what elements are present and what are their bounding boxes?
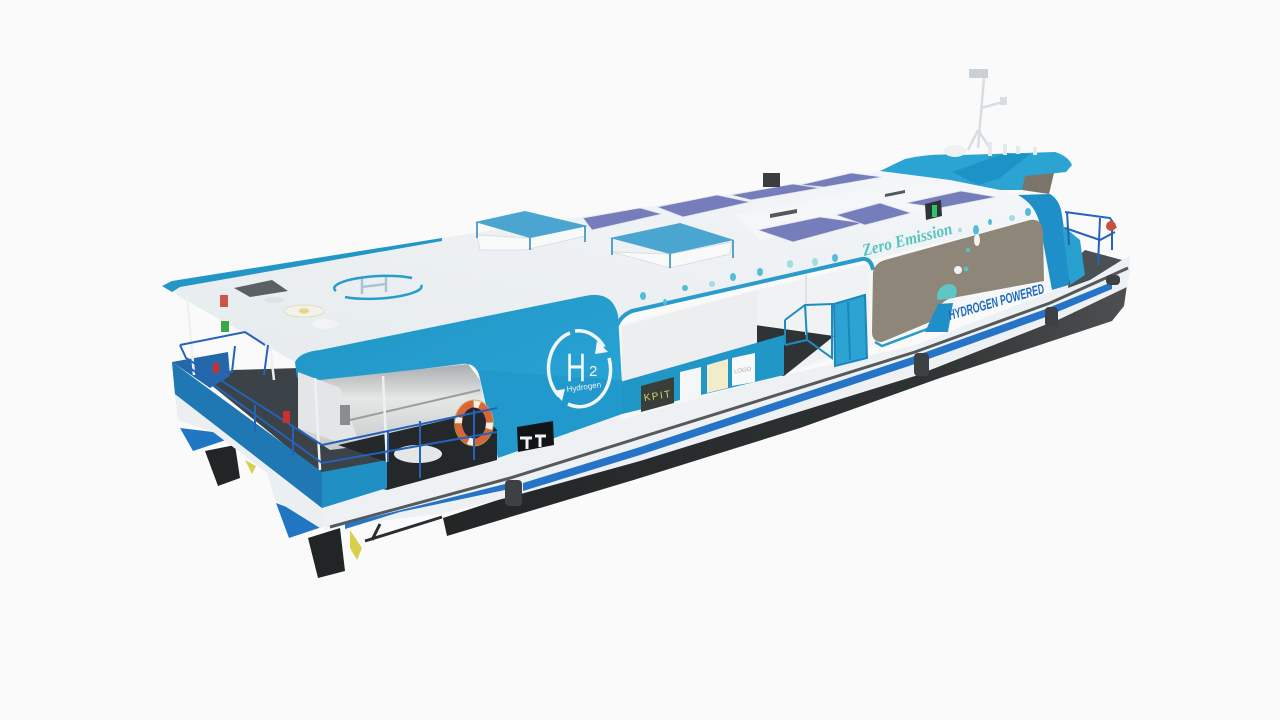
support posts xyxy=(187,295,387,470)
KPIT sign: KPIT xyxy=(643,389,673,404)
rear blue H2 panel xyxy=(295,295,622,440)
H2 circular logo: H xyxy=(566,346,586,390)
stern white hull xyxy=(175,390,340,528)
stern blue side wall xyxy=(172,362,387,508)
lower cargo deck dark xyxy=(338,412,497,490)
wheelhouse dark window xyxy=(1022,173,1054,194)
hatch cover xyxy=(394,445,442,463)
H2 circular logo: Hydrogen xyxy=(566,380,602,394)
rubbing strake xyxy=(330,268,1128,527)
side deck white band xyxy=(322,256,1130,530)
zero emission text: Zero Emission xyxy=(860,219,954,260)
lower dark hull xyxy=(443,285,1127,536)
roof blue cabin line xyxy=(616,259,873,328)
roof helipad H logo xyxy=(334,276,421,299)
main roof xyxy=(165,171,1042,362)
roof dark sign xyxy=(234,280,288,297)
stern red and green lights xyxy=(213,295,290,423)
storage tanks in cutout xyxy=(298,364,490,450)
sponsor boards xyxy=(680,353,755,402)
window droplets xyxy=(937,234,980,300)
solar panels xyxy=(583,173,996,242)
roof droplets xyxy=(640,208,1031,305)
fenders xyxy=(505,275,1120,506)
wheelhouse shade xyxy=(952,153,1030,185)
H2 circular logo: 2 xyxy=(589,363,597,380)
green navigation light xyxy=(925,200,942,220)
blue panel lower part xyxy=(478,370,622,458)
KPIT sign xyxy=(641,377,674,412)
wheelhouse roof xyxy=(880,152,1072,190)
life ring xyxy=(454,400,494,446)
bow deck and railing xyxy=(1062,212,1122,288)
hydrogen powered text: HYDROGEN POWERED xyxy=(946,280,1046,323)
blue swoosh xyxy=(925,303,953,332)
mooring bollard box xyxy=(517,421,554,452)
stern blue railings xyxy=(180,332,497,478)
blue lower cabin strip xyxy=(620,335,784,414)
open deck area xyxy=(755,264,870,376)
window cabin blue line xyxy=(875,328,930,346)
stern skegs and rudders xyxy=(180,428,442,578)
large side window xyxy=(872,220,1044,342)
raised roof section xyxy=(735,180,1010,240)
stern deck xyxy=(205,368,500,490)
H2 circular logo xyxy=(548,331,611,407)
front blue pillar xyxy=(1018,194,1072,290)
canopy two xyxy=(610,223,734,268)
roof blue edge xyxy=(162,238,442,292)
sponsor boards: LOGO xyxy=(734,366,752,375)
hull blue stripe xyxy=(345,282,1112,529)
side cabin white panel xyxy=(622,290,757,384)
canopy one xyxy=(475,211,588,250)
rail and stairs xyxy=(785,295,867,366)
exhaust stack xyxy=(763,173,780,187)
roof vents xyxy=(770,190,905,218)
upper deck white wall xyxy=(615,218,1060,420)
roof logos xyxy=(264,297,338,329)
mast and antennas xyxy=(944,69,1035,157)
